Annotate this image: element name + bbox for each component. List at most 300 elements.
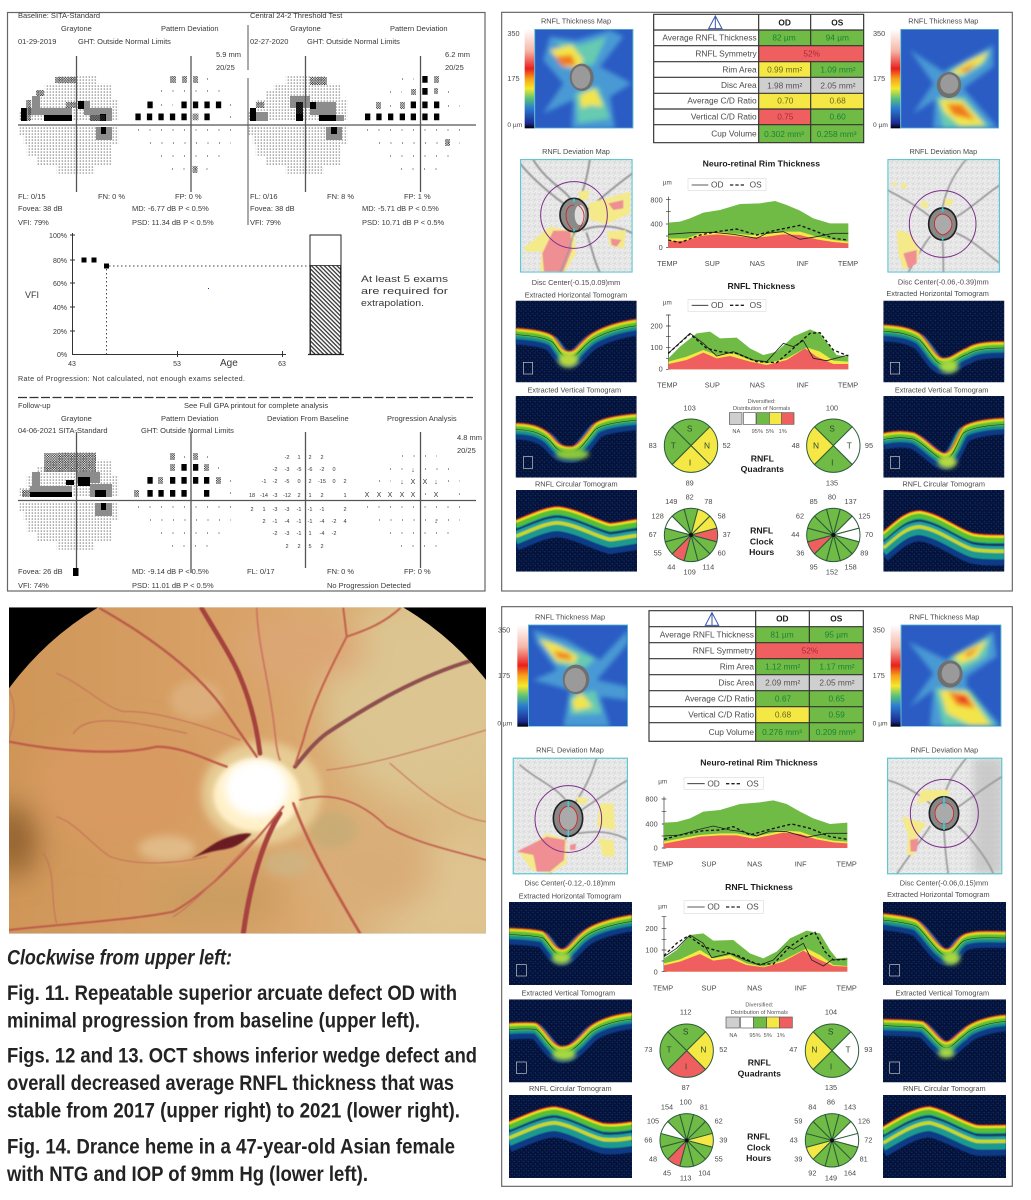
progression analysis symbols: ↓	[411, 467, 415, 474]
clock hours pie OS: 125	[858, 511, 870, 520]
follow-up exam header text: Pattern Deviation	[161, 414, 219, 423]
panel: OCT report 2021	[497, 607, 1012, 1186]
chart: neuro-retinal rim thickness: µm	[663, 180, 672, 187]
chart: RNFL thickness: SUP	[701, 984, 717, 993]
follow-up reliability and index text: No Progression Detected	[327, 581, 411, 590]
tomogram horizontal OS	[883, 289, 1004, 382]
caption figures 12 and 13	[7, 1044, 477, 1122]
baseline reliability and index text: VFI: 79%	[250, 218, 281, 227]
follow-up exam header text: 04-06-2021 SITA-Standard	[18, 426, 108, 435]
baseline reliability and index text: FN: 0 %	[98, 192, 125, 201]
summary table: 0.65	[829, 693, 845, 703]
quadrant pie OD: 87	[682, 1083, 690, 1092]
baseline exam header text: Central 24-2 Threshold Test	[250, 11, 343, 20]
tomogram horizontal OS: Extracted Horizontal Tomogram	[887, 890, 990, 899]
deviation map OS	[887, 147, 1000, 286]
baseline reliability and index text: PSD: 11.34 dB P < 0.5%	[132, 218, 214, 227]
deviation from baseline numbers: -2	[285, 455, 289, 461]
chart: neuro-retinal rim thickness	[650, 159, 858, 268]
deviation map OS: RNFL Deviation Map	[910, 745, 978, 754]
progression analysis symbols: X	[423, 479, 428, 486]
deviation from baseline numbers: -6	[308, 467, 312, 473]
summary table: 1.17 mm²	[819, 661, 855, 671]
pattern deviation plot 1	[135, 76, 231, 173]
summary table: 0.276 mm³	[762, 727, 802, 737]
RNFL clock hours label: Hours	[746, 1153, 771, 1163]
fundus photograph with drance hemorrhage	[9, 607, 486, 934]
clock hours pie OS: 95	[810, 563, 818, 572]
chart: RNFL thickness: INF	[797, 381, 809, 390]
deviation from baseline numbers: -3	[285, 507, 289, 513]
cross axes and divider	[18, 25, 476, 225]
summary table: 2.09 mm²	[765, 677, 800, 687]
deviation from baseline numbers: -4	[285, 519, 289, 525]
graytone plot 3	[20, 452, 119, 550]
panel: OCT report 2017	[502, 12, 1012, 591]
clock hours pie OD: 58	[718, 511, 726, 520]
clock hours pie OS: 137	[845, 497, 857, 506]
normative legend: Distribution of Normals	[733, 406, 790, 412]
clock hours pie OD: 60	[718, 549, 726, 558]
chart: RNFL thickness: OS	[747, 902, 759, 912]
summary table: 52%	[802, 645, 819, 655]
deviation from baseline numbers: 2	[262, 519, 266, 525]
chart: RNFL thickness: OD	[707, 902, 720, 912]
deviation from baseline numbers: -5	[285, 479, 289, 485]
chart: neuro-retinal rim thickness: µm	[658, 778, 667, 785]
VFI progression chart: 80%	[53, 258, 67, 265]
deviation from baseline numbers: -1	[273, 519, 277, 525]
chart: neuro-retinal rim thickness: 400	[650, 220, 663, 229]
caption	[6, 946, 477, 1186]
clock hours pie OD: 37	[723, 530, 731, 539]
chart: RNFL thickness: OS	[750, 300, 762, 310]
deviation from baseline numbers: 2	[308, 479, 312, 485]
warning icon	[709, 16, 722, 29]
baseline reliability and index text: PSD: 10.71 dB P < 0.5%	[362, 218, 445, 227]
RNFL clock hours label: Hours	[749, 547, 774, 557]
tomogram horizontal OD: Extracted Horizontal Tomogram	[525, 290, 627, 299]
quadrant pie OS	[792, 404, 873, 487]
deviation from baseline numbers: 1	[308, 531, 312, 537]
quadrant pie OD: 103	[684, 404, 696, 413]
tomogram circular OD: RNFL Circular Tomogram	[529, 1084, 612, 1093]
deviation from baseline numbers: -1	[297, 519, 301, 525]
clock hours pie OD: 128	[652, 511, 664, 520]
caption figures 12 and 13: Figs. 12 and 13. OCT shows inferior wedge defect and	[7, 1044, 477, 1068]
quadrant pie OD: I	[689, 457, 691, 467]
chart: neuro-retinal rim thickness: 0	[654, 844, 658, 853]
follow-up exam header text: 4.8 mm	[457, 433, 482, 442]
deviation from baseline numbers: 2	[320, 455, 324, 461]
tomogram circular OS: RNFL Circular Tomogram	[902, 480, 985, 489]
deviation from baseline numbers: 18	[249, 493, 255, 499]
deviation from baseline numbers: 2	[343, 507, 347, 513]
deviation from baseline numbers: 2	[308, 455, 312, 461]
chart: neuro-retinal rim thickness: 800	[650, 195, 663, 204]
clock hours pie OD: 154	[661, 1102, 673, 1111]
summary table: 0.302 mm³	[764, 129, 804, 139]
rate of progression note: Rate of Progression: Not calculated, not enough exams selected.	[18, 374, 245, 383]
thickness map OS	[873, 612, 1001, 727]
quadrant pie OS	[789, 1007, 872, 1092]
clock hours pie OS: 70	[865, 530, 873, 539]
RNFL clock hours label: Clock	[750, 536, 774, 546]
baseline reliability and index text: FP: 1 %	[404, 192, 431, 201]
baseline exam header text: 6.2 mm	[445, 50, 470, 59]
tomogram horizontal OD	[516, 290, 637, 382]
baseline exam header text: 20/25	[445, 63, 464, 72]
chart: neuro-retinal rim thickness: Neuro-retinal Rim Thickness	[700, 758, 818, 768]
chart: neuro-retinal rim thickness: OD	[711, 179, 723, 189]
clock hours pie OD: 113	[680, 1174, 692, 1183]
tomogram horizontal OS: Extracted Horizontal Tomogram	[886, 289, 989, 298]
chart: neuro-retinal rim thickness: OS	[747, 778, 759, 788]
summary table: 0.68	[830, 96, 846, 106]
chart: RNFL thickness: NAS	[747, 984, 762, 993]
summary table: 0.59	[829, 709, 845, 719]
chart: RNFL thickness: 200	[645, 924, 658, 933]
follow-up cross axes	[18, 432, 476, 573]
clock hours pie OS: 143	[844, 1102, 856, 1111]
baseline exam header text	[18, 11, 470, 72]
caption figure 11: Fig. 11. Repeatable superior arcuate defect OD with	[7, 982, 457, 1005]
clock hours pie OD	[649, 493, 731, 576]
deviation from baseline numbers: 2	[320, 493, 324, 499]
thickness map OS	[873, 16, 999, 129]
caption figure 11: minimal progression from baseline (upper left).	[7, 1010, 420, 1032]
chart: RNFL thickness: RNFL Thickness	[727, 281, 795, 291]
clock hours pie OD: 66	[644, 1136, 652, 1145]
optic disc	[202, 742, 322, 845]
thickness map OD: RNFL Thickness Map	[535, 612, 605, 621]
quadrant pie OD: S	[687, 423, 693, 433]
chart: RNFL thickness: 200	[650, 322, 663, 331]
summary table: 2.05 mm²	[820, 80, 856, 90]
summary table: Cup Volume	[711, 129, 757, 139]
quadrant pie OD: N	[700, 1044, 706, 1054]
chart: RNFL thickness: 100	[645, 946, 658, 955]
deviation from baseline numbers: -1	[297, 531, 301, 537]
chart: neuro-retinal rim thickness: 0	[659, 243, 663, 252]
chart: RNFL thickness	[650, 281, 858, 390]
thickness map OS: 175	[873, 74, 885, 83]
baseline exam header text: 01-29-2019	[18, 37, 56, 46]
baseline exam header text: Graytone	[61, 24, 92, 33]
VFI progression chart: 60%	[53, 281, 67, 288]
deviation from baseline numbers	[249, 455, 347, 550]
caption figure 14: Fig. 14. Drance heme in a 47-year-old Asian female	[7, 1136, 455, 1158]
clock hours pie OD: 82	[686, 493, 694, 502]
quadrant pie OS: N	[811, 1044, 817, 1054]
thickness map OS: 350	[873, 29, 885, 38]
summary table: 0.70	[777, 96, 794, 106]
deviation from baseline numbers: -1	[262, 479, 266, 485]
clock hours pie OD: 81	[700, 1102, 708, 1111]
clock hours pie OD: 104	[698, 1169, 710, 1178]
chart: neuro-retinal rim thickness: 800	[645, 795, 658, 804]
baseline exam header text: Pattern Deviation	[390, 24, 448, 33]
chart: RNFL thickness: µm	[663, 300, 672, 307]
progression analysis symbols: ↓	[400, 479, 404, 486]
tomogram horizontal OD: Extracted Horizontal Tomogram	[519, 891, 621, 900]
summary table: 1.98 mm²	[767, 80, 802, 90]
clock hours pie OS: 84	[808, 1102, 816, 1111]
clock hours pie OS: 36	[796, 549, 804, 558]
extrapolation note	[361, 274, 448, 309]
summary table	[654, 14, 864, 143]
quadrant pie OS: 100	[826, 404, 838, 413]
summary table: Disc Area	[721, 80, 757, 90]
VFI progression chart: 40%	[53, 305, 67, 312]
clock hours pie OS: 59	[794, 1117, 802, 1126]
clock hours pie OD: 62	[715, 1117, 723, 1126]
thickness map OS: 0 µm	[873, 122, 888, 129]
chart: neuro-retinal rim thickness: OS	[750, 179, 762, 189]
VFI progression chart: VFI	[25, 290, 39, 300]
extrapolation note: extrapolation.	[361, 298, 424, 309]
normative legend: Diversified:	[745, 1002, 774, 1008]
baseline exam header text: Pattern Deviation	[161, 24, 219, 33]
deviation from baseline numbers: -2	[332, 519, 336, 525]
deviation from baseline numbers: 2	[250, 507, 254, 513]
thickness map OD: 175	[498, 671, 510, 680]
clock hours pie OD: 55	[715, 1154, 723, 1163]
chart: neuro-retinal rim thickness: SUP	[705, 259, 720, 268]
clock hours pie OD: 149	[665, 497, 677, 506]
thickness map OS: 0 µm	[873, 720, 888, 727]
deviation from baseline numbers: -4	[320, 531, 324, 537]
clock hours pie OS: 44	[791, 530, 799, 539]
chart: RNFL thickness: µm	[658, 904, 667, 911]
clock hours pie OS: 62	[796, 511, 804, 520]
baseline exam header text: 20/25	[216, 63, 235, 72]
deviation from baseline numbers: 4	[343, 519, 347, 525]
quadrant pie OS: 48	[792, 441, 800, 450]
baseline reliability and index text: FL: 0/15	[18, 192, 46, 201]
summary table: 0.67	[775, 693, 791, 703]
clock hours pie OD: 45	[663, 1169, 671, 1178]
quadrant pie OD: 52	[719, 1045, 727, 1054]
VFI progression chart: 0%	[57, 352, 67, 359]
quadrant pie OS: 93	[864, 1045, 872, 1054]
quadrant pie OS: N	[813, 440, 819, 450]
quadrant pie OD: T	[666, 1044, 672, 1054]
follow-up reliability and index text: FN: 0 %	[327, 567, 354, 576]
clock hours pie OS: 126	[858, 1117, 870, 1126]
clock hours pie OS: 158	[845, 563, 857, 572]
quadrant pie OS: 135	[825, 1083, 837, 1092]
pattern deviation plot 2	[365, 76, 460, 169]
quadrant pie OD: S	[683, 1027, 689, 1037]
progression analysis symbols: X	[388, 492, 393, 499]
summary table: 0.60	[830, 112, 846, 122]
quadrant pie OD: 89	[686, 478, 694, 487]
chart: RNFL thickness: OD	[711, 300, 723, 310]
summary table: Rim Area	[722, 64, 757, 74]
caption figures 12 and 13: stable from 2017 (upper right) to 2021 (lower right).	[7, 1100, 460, 1122]
normative legend: 95%	[749, 1033, 761, 1039]
quadrant pie OS: S	[828, 1027, 834, 1037]
quadrant pie OS: S	[829, 423, 835, 433]
quadrant pie OD: 83	[649, 441, 657, 450]
follow-up exam header text: 20/25	[457, 446, 476, 455]
summary table: 0.75	[777, 112, 794, 122]
follow-up exam header text: Graytone	[61, 414, 92, 423]
clock hours pie OS: 92	[808, 1169, 816, 1178]
summary table: OS	[831, 17, 844, 27]
tomogram vertical OS: Extracted Vertical Tomogram	[896, 989, 989, 998]
deviation from baseline numbers: 2	[297, 544, 301, 550]
caption figure 11	[7, 982, 457, 1032]
chart: neuro-retinal rim thickness: TEMP	[653, 860, 673, 869]
RNFL quadrants label: RNFL	[751, 453, 775, 463]
deviation from baseline numbers: -2	[320, 467, 324, 473]
tomogram circular OS	[883, 1084, 1006, 1178]
follow-up exam header text	[18, 401, 482, 455]
clock hours pie OS: 152	[826, 567, 838, 576]
thickness map OD: 350	[507, 29, 520, 38]
deviation map OD: RNFL Deviation Map	[536, 745, 604, 754]
baseline reliability and index text: FL: 0/16	[250, 192, 278, 201]
clock hours pie OS: 81	[860, 1154, 868, 1163]
extrapolation note: At least 5 exams	[361, 274, 448, 285]
quadrant pie OS: T	[847, 440, 852, 450]
chart: neuro-retinal rim thickness: INF	[795, 860, 807, 869]
deviation from baseline numbers: -3	[273, 507, 277, 513]
pattern deviation plot 3	[134, 453, 231, 546]
deviation from baseline numbers: -3	[273, 493, 277, 499]
VFI progression chart: 20%	[53, 329, 67, 336]
tomogram horizontal OS	[883, 890, 1006, 985]
clock hours pie OS: 43	[790, 1136, 798, 1145]
summary table: Average RNFL Thickness	[660, 629, 754, 639]
panel: visual field report	[8, 11, 485, 591]
tomogram circular OD	[516, 480, 637, 572]
deviation from baseline numbers: -2	[273, 531, 277, 537]
normative legend	[726, 1002, 792, 1039]
warning icon	[705, 613, 719, 625]
chart: neuro-retinal rim thickness: TEMP	[836, 860, 857, 869]
summary table: OD	[776, 614, 789, 624]
chart: neuro-retinal rim thickness: Neuro-retinal Rim Thickness	[703, 159, 820, 169]
clock hours pie OD: 44	[667, 563, 675, 572]
summary table: OD	[778, 17, 791, 27]
deviation from baseline numbers: -1	[297, 507, 301, 513]
RNFL clock hours label: RNFL	[750, 526, 774, 536]
summary table: 94 µm	[826, 33, 849, 43]
summary table: 1.12 mm²	[765, 661, 800, 671]
thickness map OD	[507, 16, 633, 129]
chart: neuro-retinal rim thickness: TEMP	[657, 259, 678, 268]
clock hours pie OD	[644, 1098, 727, 1183]
baseline exam header text: Graytone	[290, 24, 321, 33]
summary table: 1.09 mm²	[820, 64, 856, 74]
normative legend: Distribution of Normals	[731, 1010, 788, 1016]
progression analysis symbols: X	[411, 479, 416, 486]
follow-up exam header text: Deviation From Baseline	[267, 414, 349, 423]
deviation from baseline numbers: -2	[273, 479, 277, 485]
summary table: RNFL Symmetry	[695, 49, 757, 59]
quadrant pie OD: T	[671, 440, 676, 450]
chart: RNFL thickness: TEMP	[657, 381, 678, 390]
clock hours pie OD: 105	[647, 1117, 659, 1126]
summary table	[649, 611, 863, 741]
normative legend: NA	[729, 1033, 737, 1039]
deviation map OS	[887, 745, 1002, 888]
progression analysis symbols: ↓	[434, 479, 438, 486]
baseline reliability and index text: MD: -6.77 dB P < 0.5%	[132, 204, 209, 213]
chart: neuro-retinal rim thickness	[645, 758, 857, 869]
progression analysis symbols: X	[411, 492, 416, 499]
tomogram horizontal OD	[509, 891, 632, 985]
deviation from baseline numbers: 0	[332, 479, 336, 485]
chart: RNFL thickness: RNFL Thickness	[725, 882, 793, 892]
summary table: Disc Area	[718, 677, 754, 687]
deviation map OS: RNFL Deviation Map	[909, 147, 977, 156]
thickness map OS: RNFL Thickness Map	[909, 612, 979, 621]
tomogram vertical OS	[883, 386, 1004, 478]
chart: neuro-retinal rim thickness: TEMP	[838, 259, 858, 268]
clock hours pie OD: 114	[702, 563, 714, 572]
quadrant pie OD: 52	[723, 441, 731, 450]
deviation from baseline numbers: -3	[285, 531, 289, 537]
clock hours pie OS: 80	[828, 493, 836, 502]
clock hours pie OD: 109	[684, 567, 696, 576]
chart: RNFL thickness: INF	[795, 984, 807, 993]
drance hemorrhage	[192, 833, 252, 858]
normative legend: Diversified:	[748, 399, 776, 405]
summary table: 81 µm	[770, 629, 794, 639]
RNFL quadrants label: RNFL	[748, 1058, 772, 1068]
thickness map OS: 350	[873, 626, 885, 635]
quadrant pie OD	[649, 404, 731, 487]
follow-up reliability and index text: FL: 0/17	[247, 567, 275, 576]
VFI progression chart: 43	[68, 361, 76, 368]
summary table: Vertical C/D Ratio	[691, 112, 757, 122]
deviation from baseline numbers: -1	[320, 507, 324, 513]
summary table: Average C/D Ratio	[685, 693, 754, 703]
chart: RNFL thickness: TEMP	[836, 984, 857, 993]
follow-up exam header text: GHT: Outside Normal Limits	[141, 426, 234, 435]
clock hours pie OD: 55	[654, 549, 662, 558]
tomogram vertical OS: Extracted Vertical Tomogram	[895, 386, 988, 395]
deviation map OD	[520, 147, 633, 287]
clock hours pie OD: 78	[704, 497, 712, 506]
baseline exam header text: GHT: Outside Normal Limits	[78, 37, 171, 46]
deviation from baseline numbers: -4	[320, 519, 324, 525]
summary table: Average RNFL Thickness	[662, 33, 757, 43]
summary table: RNFL Symmetry	[693, 645, 755, 655]
baseline reliability and index text	[18, 192, 445, 227]
deviation map OS: Disc Center(-0.06,0.15)mm	[900, 879, 988, 888]
clock hours pie OS	[791, 493, 873, 576]
deviation from baseline numbers: 1	[343, 493, 347, 499]
deviation from baseline numbers: -1	[308, 507, 312, 513]
baseline reliability and index text: MD: -5.71 dB P < 0.5%	[362, 204, 439, 213]
deviation from baseline numbers: -2	[273, 467, 277, 473]
thickness map OD: 350	[498, 626, 510, 635]
caption intro: Clockwise from upper left:	[7, 946, 232, 970]
summary table: 2.05 mm²	[819, 677, 855, 687]
deviation from baseline numbers: 2	[285, 544, 289, 550]
deviation from baseline numbers: 2	[297, 493, 301, 499]
RNFL quadrants label: Quadrants	[741, 464, 784, 474]
follow-up reliability and index text: MD: -9.14 dB P < 0.5%	[132, 567, 209, 576]
deviation from baseline numbers: 1	[308, 493, 312, 499]
deviation from baseline numbers: 2	[343, 479, 347, 485]
tomogram vertical OD	[516, 386, 637, 478]
